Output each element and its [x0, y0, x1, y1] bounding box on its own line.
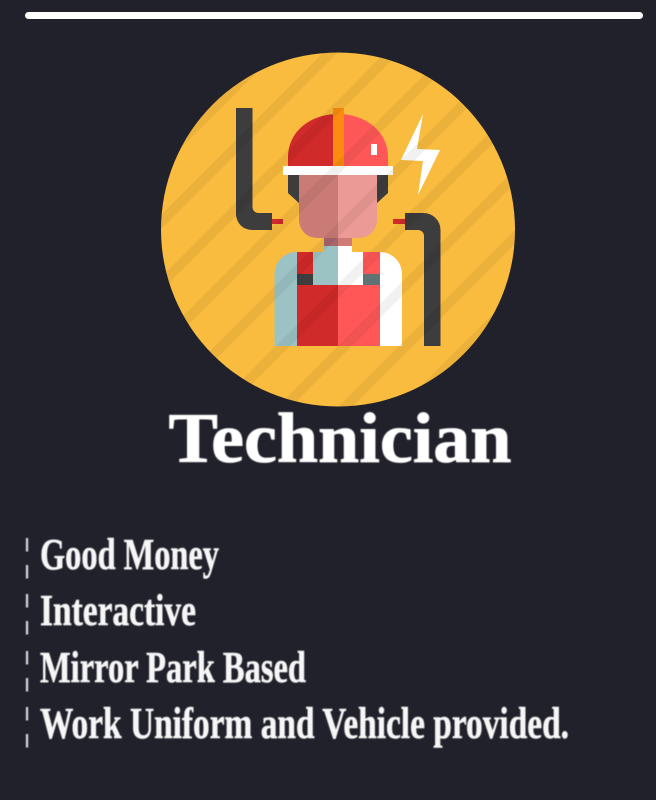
- icon: technician badge: [161, 52, 515, 406]
- list item: good money: [23, 530, 219, 579]
- yellow circle: [161, 52, 515, 406]
- icon: lightning bolt: [401, 114, 440, 195]
- neck: [324, 230, 352, 246]
- title: Technician: [168, 400, 512, 478]
- diagonal stripes: [161, 52, 515, 406]
- list item: mirror park based: ¦: [23, 643, 31, 692]
- icon: worker: [274, 108, 402, 346]
- list item: mirror park based: Mirror Park Based: [40, 643, 306, 692]
- top white bar: [25, 12, 643, 19]
- icon: right cable: [393, 213, 440, 346]
- hair: [288, 175, 388, 204]
- helmet: [283, 108, 393, 175]
- face: [299, 175, 377, 238]
- list item: good money: ¦: [23, 530, 31, 579]
- overalls: [297, 252, 380, 346]
- list item: interactive: Interactive: [40, 586, 196, 635]
- list: job perks: [23, 530, 569, 748]
- list item: uniform and vehicle: ¦: [23, 699, 31, 748]
- list item: good money: Good Money: [40, 530, 219, 579]
- shirt: [274, 246, 402, 346]
- icon: left cable: [236, 108, 283, 230]
- list item: interactive: ¦: [23, 586, 31, 635]
